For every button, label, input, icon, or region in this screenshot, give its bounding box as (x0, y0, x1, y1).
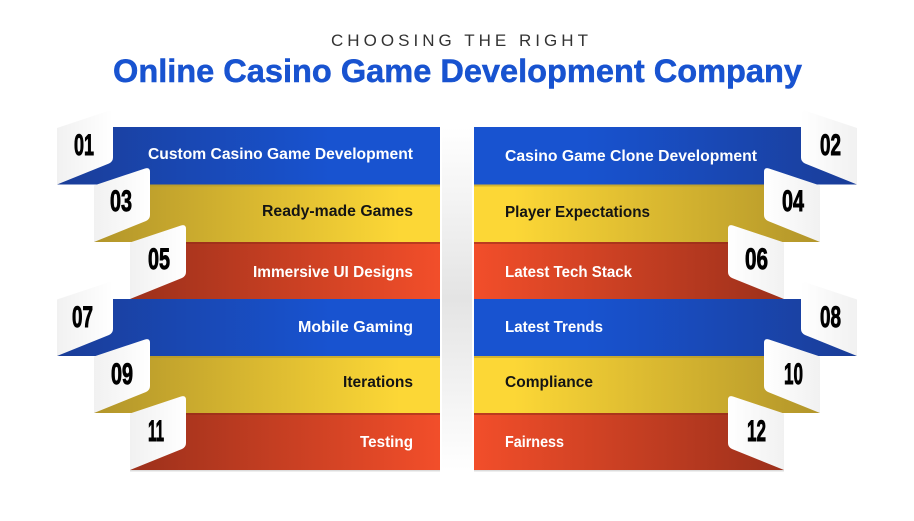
item 01 (57, 111, 440, 184)
item 07: Mobile Gaming (298, 319, 413, 336)
item 05 (130, 225, 440, 299)
item 08 (474, 282, 857, 356)
item 04: 04 (782, 185, 804, 218)
item 04 (474, 168, 820, 242)
item 07: 07 (72, 301, 93, 334)
title: Online Casino Game Development Company (113, 53, 802, 89)
item 11: Testing (360, 434, 413, 451)
item 08: Latest Trends (505, 319, 603, 336)
item 10: 10 (784, 358, 803, 391)
panel: left column (57, 111, 440, 472)
item 08: 08 (820, 301, 841, 334)
item 01: Custom Casino Game Development (148, 146, 413, 163)
item 05: Immersive UI Designs (253, 264, 413, 281)
item 09: Iterations (343, 374, 413, 391)
item 12 (474, 396, 784, 472)
item 02 (474, 111, 857, 184)
item 03: 03 (110, 185, 132, 218)
item 09 (94, 339, 440, 413)
item 07 (57, 282, 440, 356)
item 03: Ready-made Games (262, 203, 413, 220)
item 12: 12 (747, 415, 766, 448)
item 02: 02 (820, 129, 841, 162)
item 01: 01 (74, 129, 94, 162)
item 12: Fairness (505, 434, 564, 451)
panel: right column (474, 111, 857, 472)
item 04: Player Expectations (505, 204, 650, 221)
item 02: Casino Game Clone Development (505, 148, 757, 165)
item 06 (474, 225, 784, 299)
subtitle: CHOOSING THE RIGHT (331, 31, 588, 50)
item 09: 09 (111, 358, 133, 391)
item 10 (474, 339, 820, 413)
item 11 (130, 396, 440, 472)
item 10: Compliance (505, 374, 593, 391)
item 05: 05 (148, 243, 170, 276)
item 06: Latest Tech Stack (505, 264, 632, 281)
item 11: 11 (148, 415, 164, 448)
center divider strip (442, 127, 472, 470)
item 03 (94, 168, 440, 242)
item 06: 06 (745, 243, 768, 276)
